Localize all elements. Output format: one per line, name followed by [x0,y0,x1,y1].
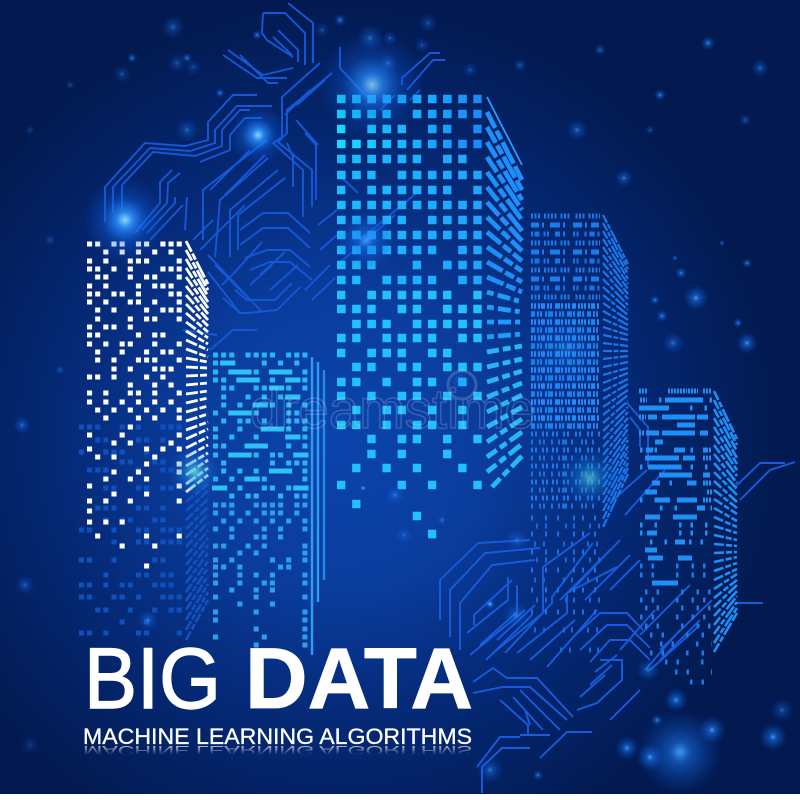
tower: white building front [79,244,182,633]
tower: white building side [186,241,208,640]
white squares [87,244,182,566]
lower rows [531,434,600,498]
tower: cyan building vertical side lines [312,357,324,655]
circuit traces: lower right [440,403,795,793]
top rows [531,216,600,297]
top rows [337,99,482,144]
lower rows [337,295,482,534]
subtitle reflection: MACHINE LEARNING ALGORITHMS [83,743,472,758]
circuit traces: upper left [105,3,445,350]
bars [639,400,710,583]
title word: DATA: DATA [245,631,473,727]
upper squares [213,355,307,496]
tick rows [639,391,712,500]
bottom white margin [0,794,800,800]
watermark: dreamstime [250,377,535,440]
middle rows [337,159,482,280]
subtitle: MACHINE LEARNING ALGORITHMS [83,724,472,749]
title: BIG DATA [84,631,473,727]
tower: far right-center building front [531,216,600,650]
tower: cyan building [212,355,309,645]
subtitle with reflection [83,724,472,758]
tower: far right-center building side [603,215,628,527]
tower: right building side [714,391,737,652]
dim lower squares [79,427,182,633]
dense middle rows [531,306,600,418]
title word: BIG: BIG [84,631,221,727]
upper bars [212,363,309,488]
tower: main building side [487,97,522,487]
tower: right building front [639,391,712,682]
tower: main building front [337,99,482,534]
lower squares [213,505,307,645]
